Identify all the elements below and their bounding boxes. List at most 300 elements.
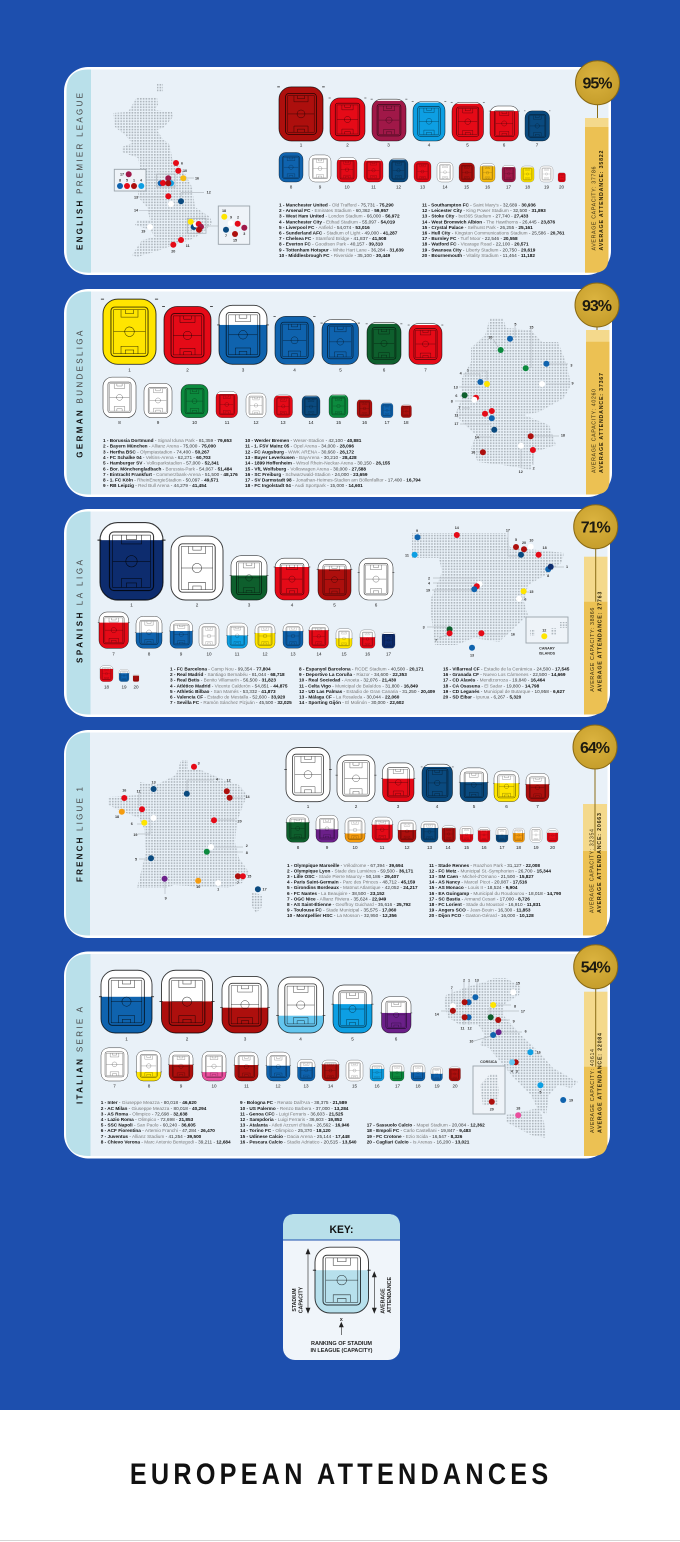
stadium 2 <box>159 970 215 1033</box>
stadium 8 <box>286 815 310 842</box>
stadium rank numbers: 20 <box>559 184 564 190</box>
club list: 5 - Liverpool FC - Anfield - 54,074 - 53,016 <box>279 225 370 230</box>
pin numbers: 4 <box>460 372 463 376</box>
pin numbers: 2 <box>533 467 535 471</box>
club list: 2 - Arsenal FC - Emirates Stadium - 60,362 - 59,957 <box>279 208 389 213</box>
stadium 20 <box>558 173 566 182</box>
club list: 12 - Sampdoria - Luigi Ferraris - 36,603 - 19,852 <box>240 1117 343 1122</box>
stadium rank numbers: 10 <box>211 1084 217 1088</box>
stadium rank numbers: 15 <box>464 184 469 190</box>
stadium rank numbers: 18 <box>415 1084 421 1088</box>
club list: 17 - SC Bastia - Armand Cesari - 17,000 - 8,726 <box>429 896 530 901</box>
inset: Canary Islands: 12 <box>542 628 546 632</box>
label: average attendance: AVERAGE <box>380 1288 386 1314</box>
stadium rank numbers: 2 <box>346 142 349 148</box>
attendance band <box>583 804 607 936</box>
stadium rank numbers: 3 <box>244 1036 247 1042</box>
stadium 17 <box>502 165 516 182</box>
stadium 12 <box>397 820 417 842</box>
average capacity and attendance: AVERAGE CAPACITY: 37786 <box>592 166 598 250</box>
stadium rank numbers: 1 <box>300 142 303 148</box>
pin numbers: 18 <box>115 815 119 819</box>
pin numbers: 7 <box>451 986 453 990</box>
stadium rank numbers: 14 <box>316 652 322 656</box>
inset: Canary Islands: ISLANDS <box>539 652 556 656</box>
club list: 13 - Málaga CF - La Rosaleda - 30,044 - 22,060 <box>299 694 400 700</box>
stadium rank numbers: 5 <box>473 804 476 809</box>
pin numbers: 19 <box>141 229 145 233</box>
inset: London: 7 <box>225 234 227 238</box>
stadium rank numbers: 12 <box>275 1084 281 1088</box>
pin numbers <box>435 978 573 1111</box>
stadium 11 <box>364 159 383 182</box>
stadium rank numbers: 7 <box>536 142 539 148</box>
stadium rank numbers: 1 <box>130 602 133 608</box>
inset: Canary Islands <box>526 617 568 656</box>
pin numbers: 11 <box>405 553 409 557</box>
stadium 5 <box>317 559 352 600</box>
inset: north west: 5 <box>126 179 128 183</box>
stadium 6 <box>489 106 520 141</box>
club list: 9 - RB Leipzig - Red Bull Arena - 44,279 - 41,454 <box>103 483 207 488</box>
club list: 3 - West Ham United - London Stadium - 66,000 - 56,972 <box>279 214 400 219</box>
average capacity and attendance: AVERAGE CAPACITY: 40260 <box>592 389 598 473</box>
stadium rank numbers: 12 <box>396 184 401 190</box>
pin numbers: 14 <box>134 209 139 213</box>
stadium rank numbers: 19 <box>121 684 127 690</box>
stadium 11 <box>226 623 248 648</box>
stadium 5 <box>321 319 360 364</box>
club list: 2 - Bayern München - Allianz Arena - 75,000 - 75,000 <box>103 444 216 449</box>
stadium rank numbers: 18 <box>516 845 521 850</box>
stadium rank numbers: 15 <box>464 845 469 850</box>
pin numbers: 8 <box>246 851 248 855</box>
club list: 1 - Manchester United - Old Trafford - 75,731 - 75,290 <box>279 202 394 208</box>
club list: 10 - US Palermo - Renzo Barbera - 37,000 - 13,284 <box>240 1106 349 1111</box>
club list: 15 - Udinese Calcio - Dacia Arena - 25,144 - 17,448 <box>240 1134 350 1139</box>
club list: 5 - Girondins Bordeaux - Matmut Atlantique - 42,052 - 24,217 <box>287 885 418 890</box>
club list: 9 - Bologna FC - Renato Dall'Ara - 38,375 - 21,589 <box>240 1100 347 1105</box>
league name: FRENCH LIGUE 1 <box>76 786 84 882</box>
club list: 11 - 1. FSV Mainz 05 - Opel Arena - 34,000 - 28,096 <box>245 444 354 449</box>
stadium row 2 <box>103 377 412 418</box>
average capacity and attendance: AVERAGE ATTENDANCE: 20663 <box>597 813 603 913</box>
stadium 1 <box>99 970 154 1033</box>
stadium rank numbers: 13 <box>427 845 432 850</box>
inset: London <box>218 206 250 244</box>
stadium rank numbers: 2 <box>186 368 189 372</box>
attendance band <box>584 992 608 1156</box>
stadium 5 <box>331 985 374 1033</box>
stadium 3 <box>371 99 407 141</box>
pin numbers: 9 <box>165 896 167 900</box>
club list <box>287 863 562 918</box>
inset: north west <box>114 169 146 191</box>
pin numbers: 2 <box>428 576 430 580</box>
stadium row 1 <box>101 299 443 364</box>
club list: 4 - FC Schalke 04 - Veltins-Arena - 62,271 - 60,703 <box>103 455 211 460</box>
club list: 1 - Inter - Giuseppe Meazza - 80,018 - 46,620 <box>101 1100 197 1105</box>
label: stadium capacity: CAPACITY <box>298 1286 304 1313</box>
club list: 1 - Borussia Dortmund - Signal Iduna Park - 81,359 - 79,653 <box>103 438 232 443</box>
average capacity and attendance <box>592 150 605 250</box>
pin numbers: 17 <box>263 888 267 892</box>
stadium 2 <box>162 306 213 364</box>
pin numbers: 10 <box>488 336 492 340</box>
stadium rank numbers: 3 <box>242 368 245 372</box>
stadium rank numbers: 9 <box>319 184 322 190</box>
pin numbers: 8 <box>547 574 549 578</box>
pin numbers: 19 <box>569 1098 573 1102</box>
percentage badge <box>575 283 619 330</box>
pin numbers: 11 <box>137 790 141 794</box>
club list: 6 - Sunderland AFC - Stadium of Light - 49,000 - 41,287 <box>279 230 398 236</box>
club list: 4 - Paris Saint-Germain - Parc des Princes - 48,712 - 45,159 <box>287 880 416 885</box>
average capacity and attendance: AVERAGE CAPACITY: 38866 <box>590 608 596 692</box>
stadium 13 <box>420 821 439 842</box>
stadium rank numbers: 8 <box>148 652 151 656</box>
stadium rank numbers: 4 <box>299 1036 302 1042</box>
stadium rank numbers: 1 <box>307 804 310 809</box>
pin numbers: 10 <box>469 1039 473 1043</box>
pin numbers: 6 <box>131 822 133 826</box>
stadium 8 <box>279 152 303 182</box>
stadium 4 <box>421 764 454 802</box>
stadium 6 <box>493 771 520 802</box>
stadium rank numbers: 12 <box>253 420 259 425</box>
stadium 13 <box>282 624 304 648</box>
pin numbers: 16 <box>122 788 126 792</box>
stadium rank numbers: 9 <box>180 652 183 656</box>
club list: 11 - Southampton FC - Saint Mary's - 32,689 - 30,936 <box>422 202 536 208</box>
label: stadium capacity: STADIUM <box>292 1288 298 1312</box>
stadium rank numbers: 8 <box>148 1084 151 1088</box>
club list: 3 - Hertha BSC - Olympiastadion - 74,400 - 50,267 <box>103 449 210 454</box>
stadium 3 <box>220 976 270 1033</box>
stadium rank numbers: 4 <box>428 142 431 148</box>
pin numbers: 12 <box>468 1027 472 1031</box>
inset: Sardinia / Corsica <box>473 1060 505 1114</box>
stadium 14 <box>302 396 320 418</box>
stadium 17 <box>496 828 508 842</box>
inset: London: 2 <box>237 216 239 220</box>
stadium rank numbers: 9 <box>326 845 329 850</box>
stadium rank numbers: 20 <box>452 1084 458 1088</box>
pin numbers: 17 <box>521 1010 525 1014</box>
map: Spain <box>405 526 568 657</box>
stadium row 2 <box>279 152 566 182</box>
club list: 19 - CD Leganés - Municipal de Butarque - 10,958 - 6,627 <box>443 689 565 694</box>
stadium rank numbers: 15 <box>336 420 341 425</box>
club list: 17 - Burnley FC - Turf Moor - 22,546 - 20,558 <box>422 236 518 241</box>
pin numbers: 1 <box>468 978 470 982</box>
panel: French Ligue 1 <box>64 725 617 938</box>
club list: 16 - Pescara Calcio - Stadio Adriatico - 20,515 - 13,540 <box>240 1139 357 1144</box>
club list: 9 - Toulouse FC - Stade Municipal - 35,575 - 17,060 <box>287 908 397 913</box>
stadium 11 <box>371 817 393 842</box>
key panel <box>283 1214 400 1360</box>
pin numbers: 7 <box>237 881 239 885</box>
pin numbers: 6 <box>525 1029 527 1033</box>
pin numbers: 6 <box>524 597 526 601</box>
panel card <box>64 67 611 275</box>
stadium 20 <box>547 829 558 842</box>
key card <box>283 1214 400 1360</box>
club list: 3 - AS Roma - Olimpico - 72,698 - 32,638 <box>101 1111 188 1116</box>
pin numbers: 4 <box>216 777 219 781</box>
stadium 10 <box>344 818 366 842</box>
panel: Spanish La Liga <box>64 505 618 717</box>
stadium rank numbers: 15 <box>341 652 347 656</box>
club list: 16 - SC Freiburg - Schwarzwald-Stadion - 24,000 - 23,659 <box>245 472 368 477</box>
pin numbers: 4 <box>511 1069 514 1073</box>
stadium rank numbers: 17 <box>506 184 511 190</box>
pin numbers: 7 <box>435 638 437 642</box>
club list: 5 - Athletic Bilbao - San Mamés - 53,332 - 41,873 <box>170 689 276 694</box>
pin numbers: 8 <box>514 1005 516 1009</box>
league strip <box>66 954 90 1156</box>
stadium rank numbers: 19 <box>533 845 539 850</box>
stadium rank numbers: 2 <box>196 602 199 608</box>
stadium 6 <box>366 322 402 364</box>
panel: English Premier League <box>64 61 620 275</box>
stadium 15 <box>335 629 353 648</box>
stadium 7 <box>98 612 130 648</box>
club list: 4 - Lazio Roma - Olimpico - 72,698 - 21,853 <box>101 1117 194 1122</box>
rank marker <box>339 1317 343 1335</box>
stadium rank numbers: 1 <box>125 1036 128 1042</box>
stadium row 2 <box>286 815 558 842</box>
stadium 4 <box>273 316 316 364</box>
stadium 3 <box>230 556 268 600</box>
pin numbers: 15 <box>529 326 533 330</box>
league name: SPANISH LA LIGA <box>76 559 84 663</box>
panel card <box>64 289 612 497</box>
pin numbers: 3 <box>570 363 572 367</box>
club list: 6 - ACF Fiorentina - Artemio Franchi - 47,284 - 26,470 <box>101 1128 215 1133</box>
stadium rank numbers: 14 <box>328 1084 333 1088</box>
stadium rank numbers <box>290 142 564 190</box>
average capacity and attendance: AVERAGE ATTENDANCE: 22084 <box>598 1033 604 1133</box>
stadium rank numbers: 5 <box>351 1036 354 1042</box>
club list: 8 - Chievo Verona - Marc Antonio Bentegodi - 39,211 - 12,684 <box>101 1139 231 1144</box>
stadium 1 <box>277 87 325 141</box>
club list: 20 - Dijon FCO - Gaston-Gérard - 16,000 - 10,128 <box>429 913 534 918</box>
inset: London: 9 <box>230 216 232 220</box>
stadium rank numbers: 16 <box>481 845 487 850</box>
pin numbers: 8 <box>451 400 453 404</box>
label: ranking <box>310 1341 373 1354</box>
league strip <box>66 70 91 273</box>
stadium rank numbers: 20 <box>550 845 555 850</box>
stadium 15 <box>459 163 474 182</box>
stadium rank numbers: 3 <box>387 142 390 148</box>
panel: Italian Serie A <box>64 945 618 1158</box>
club list: 12 - UD Las Palmas - Estadio de Gran Canaria - 31,250 - 20,409 <box>299 689 435 694</box>
stadium 13 <box>297 1059 316 1081</box>
pin numbers: 6 <box>181 161 183 165</box>
percentage badge <box>576 61 620 118</box>
stadium 12 <box>266 1052 291 1081</box>
average capacity and attendance <box>590 592 604 692</box>
inset: London: 18 <box>222 209 226 213</box>
stadium 9 <box>315 815 339 842</box>
club list: 17 - CD Alavés - Mendizorroza - 19,840 - 16,464 <box>443 678 545 683</box>
club list: 14 - West Bromwich Albion - The Hawthorns - 26,445 - 23,876 <box>422 219 555 224</box>
club list: 4 - Atlético Madrid - Vicente Calderón - 54,851 - 44,875 <box>170 683 288 688</box>
stadium 14 <box>441 826 456 842</box>
footer band <box>0 1410 680 1542</box>
percentage badge: 64% <box>580 740 610 757</box>
pin numbers: 4 <box>428 581 431 585</box>
stadium 17 <box>381 403 393 418</box>
stadium 18 <box>401 405 412 418</box>
club list: 12 - Leicester City - King Power Stadium - 32,500 - 31,893 <box>422 208 546 213</box>
inset: north west: 4 <box>140 179 143 183</box>
pin numbers: 9 <box>513 1019 515 1023</box>
pin numbers: 10 <box>529 538 533 542</box>
club list: 12 - FC Metz - Municipal St.-Symphorien - 26,700 - 15,344 <box>429 868 551 873</box>
stadium rank numbers: 5 <box>466 142 469 148</box>
label: average attendance: ATTENDANCE <box>387 1276 393 1313</box>
pin numbers <box>451 322 574 474</box>
stadium 18 <box>410 1064 426 1081</box>
pin numbers: 16 <box>511 633 515 637</box>
club list: 19 - FC Crotone - Ezio Scida - 16,547 - 8,326 <box>367 1134 463 1139</box>
club list: 7 - Eintracht Frankfurt - Commerzbank-Arena - 51,500 - 48,176 <box>103 472 238 477</box>
average capacity and attendance <box>589 813 603 913</box>
pin numbers: 3 <box>423 626 425 630</box>
pin numbers: 13 <box>152 781 156 785</box>
average capacity and attendance: AVERAGE ATTENDANCE: 27763 <box>598 592 604 692</box>
pin numbers: 1 <box>217 887 219 891</box>
pin numbers: 10 <box>183 169 187 173</box>
stadium rank numbers: 4 <box>436 804 439 809</box>
stadium rank numbers: 13 <box>290 652 296 656</box>
average capacity and attendance: AVERAGE ATTENDANCE: 37367 <box>599 373 605 473</box>
club list: 14 - Torino FC - Olimpico - 25,370 - 18,120 <box>240 1128 331 1133</box>
percentage badge <box>573 725 617 851</box>
stadium rank numbers: 9 <box>180 1084 183 1088</box>
pin numbers: 12 <box>207 191 211 195</box>
pin numbers: 9 <box>416 529 418 533</box>
stadium rank numbers: 16 <box>365 652 370 656</box>
stadium 4 <box>274 558 310 600</box>
pin numbers: 16 <box>471 451 475 455</box>
pin numbers: 1 <box>467 368 469 372</box>
club list: 6 - FC Nantes - La Beaujoire - 38,500 - 23,152 <box>287 891 385 896</box>
stadium rank numbers: 7 <box>536 804 539 809</box>
stadium rank numbers: 10 <box>206 652 212 656</box>
stadium rank numbers: 13 <box>280 420 286 425</box>
stadium rank numbers: 13 <box>303 1084 309 1088</box>
club list: 3 - Real Betis - Benito Villamarín - 56,500 - 31,823 <box>170 678 276 683</box>
stadium rank numbers: 7 <box>113 1084 116 1088</box>
club list: 18 - Empoli FC - Carlo Castellani - 19,847 - 9,483 <box>367 1128 471 1133</box>
club list: 13 - Bayer Leverkusen - BayArena - 30,210 - 28,428 <box>245 455 357 460</box>
stadium rank numbers: 14 <box>445 845 451 850</box>
club list: 14 - AS Nancy - Marcel Picot - 20,087 - 17,516 <box>429 880 527 885</box>
average capacity and attendance: AVERAGE CAPACITY: 40614 <box>590 1049 596 1133</box>
club list: 16 - Granada CF - Nuevo Los Cármenes - 22,500 - 14,669 <box>443 672 566 677</box>
pin numbers: 18 <box>516 1107 520 1111</box>
pin numbers: 11 <box>454 413 458 417</box>
stadium rank numbers: 6 <box>375 602 378 608</box>
pin numbers: 7 <box>458 406 460 410</box>
average capacity and attendance: AVERAGE CAPACITY: 32354 <box>589 829 595 913</box>
league strip <box>66 292 91 494</box>
stadium 19 <box>530 828 542 842</box>
stadium 18 <box>99 666 114 682</box>
inset: London: 15 <box>233 238 237 242</box>
stadium rank numbers: 9 <box>157 420 160 425</box>
pin numbers: 11 <box>186 244 190 248</box>
club list: 16 - Hull City - Kingston Communications Stadium - 25,586 - 20,761 <box>422 230 565 236</box>
league name: GERMAN BUNDESLIGA <box>76 330 84 458</box>
pin numbers: 1 <box>566 565 568 569</box>
stadium 6 <box>358 558 394 600</box>
stadium 9 <box>169 621 193 648</box>
club list: 20 - Cagliari Calcio - Is Arenas - 16,200 - 13,021 <box>367 1139 470 1144</box>
stadium 13 <box>414 161 431 182</box>
club list: 5 - SSC Napoli - San Paolo - 60,240 - 36,605 <box>101 1123 196 1128</box>
stadium rank numbers: 4 <box>293 368 296 372</box>
pin numbers: 5 <box>539 1090 541 1094</box>
stadium rank numbers: 3 <box>248 602 251 608</box>
stadium rank numbers: 6 <box>505 804 508 809</box>
pin numbers: 2 <box>246 844 248 848</box>
club list: 2 - Real Madrid - Santiago Bernabéu - 81,044 - 68,718 <box>170 672 285 677</box>
club list: 19 - Swansea City - Liberty Stadium - 20,750 - 20,619 <box>422 247 536 252</box>
stadium 7 <box>101 1048 128 1081</box>
stadium 9 <box>144 383 172 418</box>
pin numbers: 3 <box>198 761 200 765</box>
club list: 15 - Crystal Palace - Selhurst Park - 26,255 - 25,161 <box>422 225 533 230</box>
stadium 19 <box>540 166 553 182</box>
stadium 1 <box>101 299 158 364</box>
inset: north west: 8 <box>119 179 121 183</box>
stadium 2 <box>329 98 366 141</box>
club list: 12 - FC Augsburg - WWK ARENA - 30,660 - 26,172 <box>245 449 354 454</box>
average capacity and attendance <box>590 1033 604 1133</box>
stadium rank numbers: 17 <box>395 1084 400 1088</box>
percentage badge <box>574 945 618 1067</box>
percentage badge: 54% <box>581 960 611 976</box>
stadium 15 <box>329 394 348 418</box>
league strip <box>66 732 90 936</box>
stadium rank numbers: 4 <box>291 602 294 608</box>
club list: 11 - Genoa CFC - Luigi Ferraris - 36,603 - 21,525 <box>240 1111 344 1116</box>
stadium 10 <box>181 384 208 418</box>
stadium 11 <box>216 391 238 418</box>
stadium 14 <box>437 162 453 182</box>
club list: 14 - 1899 Hoffenheim - Wirsol Rhein-Neckar-Arena - 30,150 - 26,155 <box>245 461 391 466</box>
stadium 8 <box>136 1051 162 1081</box>
club list: 10 - Werder Bremen - Weser-Stadion - 42,100 - 40,881 <box>245 438 362 443</box>
stadium 18 <box>521 166 534 182</box>
stadium 4 <box>276 977 325 1033</box>
club list: 8 - 1. FC Köln - RheinEnergieStadion - 50,097 - 49,571 <box>103 478 219 483</box>
stadium 19 <box>431 1067 443 1081</box>
league strip <box>66 512 90 714</box>
stadium rank numbers: 8 <box>290 184 293 190</box>
percentage badge: 93% <box>582 298 612 315</box>
stadium rank numbers: 15 <box>352 1084 357 1088</box>
club list: 13 - SM Caen - Michel-d'Ornano - 21,500 - 15,827 <box>429 874 534 879</box>
stadium 7 <box>525 773 550 802</box>
club list: 8 - Espanyol Barcelona - RCDE Stadium - 40,500 - 20,171 <box>299 666 424 672</box>
club list <box>101 1100 485 1144</box>
